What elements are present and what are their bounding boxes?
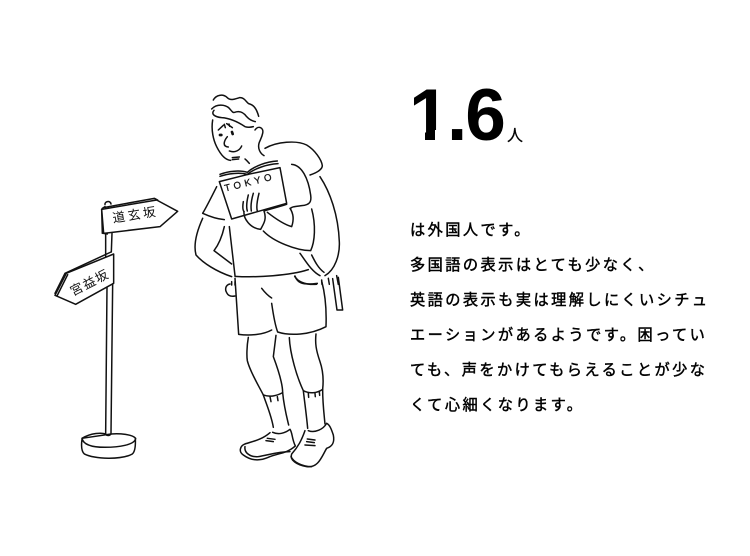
hand behind back	[226, 284, 235, 296]
shorts	[235, 276, 326, 335]
book	[219, 161, 287, 219]
illustration: traveller upper body	[195, 95, 339, 285]
legs and socks	[247, 334, 325, 428]
body text: 多国語の表示はとても少なく、	[410, 257, 656, 274]
big number: 1.6	[409, 74, 506, 156]
body text: くて心細くなります。	[410, 397, 584, 414]
illustration: traveller lower body	[226, 276, 343, 467]
body text: ても、声をかけてもらえることが少な	[410, 362, 707, 379]
backpack strap	[333, 277, 343, 310]
sign: left arrow: 宮益坂	[68, 266, 112, 299]
illustration: signpost	[55, 198, 178, 458]
backpack	[263, 142, 339, 276]
sign: right arrow	[102, 198, 178, 234]
body text: 英語の表示も実は理解しにくいシチュ	[410, 292, 710, 309]
right shoe	[291, 423, 334, 467]
face	[212, 120, 264, 163]
left shoe	[240, 429, 295, 460]
body text: エーションがあるようです。困ってい	[410, 327, 707, 344]
hand	[243, 193, 293, 229]
body text: は外国人です。	[410, 222, 532, 239]
book: TOKYO	[223, 171, 276, 195]
sign: right arrow: 道玄坂	[112, 205, 159, 226]
sign: left arrow	[55, 252, 114, 304]
body text	[410, 222, 710, 414]
t-shirt and arm	[195, 187, 338, 285]
hair	[212, 95, 259, 127]
signpost pole	[105, 202, 113, 435]
signpost base	[82, 433, 136, 458]
big number: 人	[507, 122, 523, 146]
